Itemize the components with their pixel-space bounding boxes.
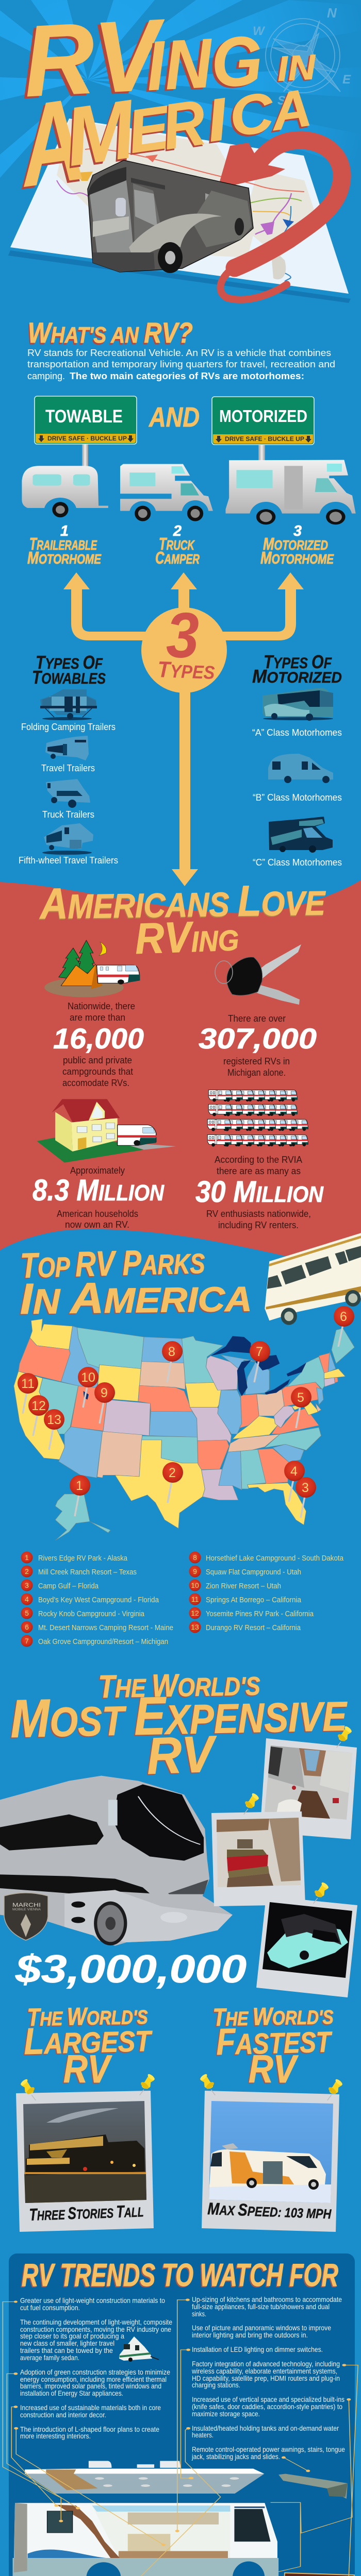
heading: The World's Fastest RV: FASTEST	[216, 2019, 333, 2063]
heading: The World's Fastest RV: THE WORLD'S	[212, 2002, 334, 2031]
label: Fifth-wheel Travel Trailers: Fifth-wheel Travel Trailers	[19, 855, 118, 866]
legend: RV parks 8-13: Durango RV Resort – California	[206, 1623, 301, 1632]
title: RVing in America: RV	[21, 0, 170, 118]
heading: Top RV Parks in America	[19, 1242, 252, 1324]
title: RVing in America: RV	[18, 0, 167, 120]
title: RVing in America: I	[202, 85, 233, 155]
text: trends left column: trailers that can be towed by the	[20, 2346, 113, 2354]
title: RVing in America: C	[225, 80, 278, 148]
road map paper	[8, 118, 351, 303]
heading: The World's Fastest RV: THE WORLD'S	[211, 2003, 333, 2032]
red route arrow swoosh	[220, 140, 342, 300]
text: trends right column: wireless capability, elaborate entertainment systems,	[191, 2367, 337, 2375]
vehicle: travel trailer	[45, 736, 89, 760]
numbered label: 3 Motorized Motorhome	[260, 523, 334, 567]
compass rose: W	[253, 24, 266, 38]
text: trends right column: sinks.	[192, 2310, 206, 2318]
sunburst rays	[0, 0, 361, 178]
text: 16,000 campgrounds: 16,000	[53, 1022, 144, 1055]
pin 13: 13	[47, 1413, 61, 1427]
text: 8.3 million households: 8.3 MILLION	[32, 1174, 165, 1207]
text: trends right column: interior lighting and bring the outdoors in.	[192, 2331, 308, 2339]
pin 10	[78, 1367, 99, 1408]
polaroid: glowing outline photo	[256, 1896, 357, 1997]
pin 12	[28, 1395, 49, 1436]
legend: RV parks 8-13: Squaw Flat Campground - Utah	[206, 1568, 301, 1577]
text: 307,000 registered RVs: registered RVs in	[223, 1056, 290, 1066]
pin 1	[70, 1475, 90, 1516]
pin 7: 7	[256, 1345, 263, 1359]
compass rose: S	[277, 94, 286, 108]
sign: Motorized	[212, 397, 314, 462]
push pins on large and fast polaroids	[20, 2073, 343, 2100]
text: 8.3 million households: Approximately	[70, 1165, 125, 1176]
legend: RV parks 8-13: 8	[193, 1553, 197, 1562]
arrows: three types branching	[63, 572, 304, 886]
pin 3	[296, 1477, 316, 1518]
heading: The World's Largest RV: RV	[63, 2047, 112, 2091]
sign: Towable: TOWABLE	[45, 406, 123, 427]
legend: RV parks 1-7: 5	[25, 1609, 29, 1617]
illustration: RV keys	[215, 944, 301, 1005]
heading: The World's Most Expensive RV: THE WORLD'S	[98, 1667, 260, 1705]
compass rose	[253, 5, 351, 108]
heading: The World's Largest RV: THE WORLD'S	[26, 2003, 147, 2032]
polaroid: three stories tall	[16, 2091, 154, 2232]
badge: 3 Types	[141, 600, 227, 693]
vehicle: truck trailer	[46, 779, 90, 808]
text: 8.3 million households: American households	[57, 1209, 138, 1219]
polaroid: three stories tall: THREE STORIES TALL	[29, 2201, 144, 2224]
text: trends left column: barriers, improved solar panels, tinted windows and	[20, 2382, 161, 2390]
text: trends right column: jack, stabilizing jacks and slides.	[191, 2452, 280, 2461]
legend: RV parks 1-7: Mt. Desert Narrows Camping Resort - Maine	[38, 1623, 173, 1632]
illustration: campground with tent and RV	[44, 940, 140, 997]
text: trends right column: Insulated/heated holding tanks and on-demand water	[192, 2424, 339, 2432]
text: trends left column: more interesting interiors.	[20, 2432, 91, 2440]
heading: The World's Most Expensive RV: RV	[145, 1726, 218, 1786]
pin 12: 12	[31, 1399, 46, 1413]
heading: The World's Largest RV: LARGEST	[22, 2019, 153, 2063]
illustration: cream vintage RV	[265, 1233, 361, 1325]
text: trends left column: average family sedan.	[20, 2353, 79, 2362]
panel: RV trends	[9, 2253, 355, 2576]
legend: RV parks 1-7	[21, 1552, 173, 1647]
heading: Types of Towables: TYPES OF	[36, 652, 103, 673]
title: RVing in America: E	[122, 95, 173, 168]
label: A class: “A” Class Motorhomes	[252, 727, 342, 738]
photo: kitchen interior	[281, 2573, 354, 2576]
text: 16,000 campgrounds: accomodate RVs.	[62, 1078, 129, 1088]
text: 16,000 campgrounds	[53, 1001, 144, 1088]
text: trends left column: new class of smaller, lighter travel	[20, 2339, 114, 2347]
price: $3,000,000: $3,000,000	[15, 1947, 247, 1991]
title: RVing in America: A	[266, 78, 315, 142]
legend: RV parks 1-7: 3	[25, 1581, 29, 1589]
legend: RV parks 1-7: 7	[25, 1637, 29, 1645]
numbered label: 1 Trailerable Motorhome: 1	[60, 523, 69, 539]
heading: The World's Most Expensive RV: THE WORLD'S	[97, 1668, 259, 1706]
text: 8.3 million households: now own an RV.	[65, 1219, 129, 1230]
text: trends right column: Installation of LED lighting on dimmer switches.	[192, 2345, 323, 2353]
legend: RV parks 1-7: Mill Creek Ranch Resort – Texas	[38, 1568, 137, 1577]
title: RVing in America: IN	[275, 48, 316, 90]
heading: What's an RV?: WHAT'S AN RV?	[28, 316, 193, 349]
text: trends left column: construction and interior decor.	[20, 2411, 106, 2419]
text: trends left column: construction components, moving the RV industry one	[20, 2325, 171, 2333]
text: trends left column: Increased use of sustainable materials both in core	[20, 2403, 161, 2412]
title: RVing in America: E	[124, 93, 175, 166]
text: trends left column: step closer to its goal of producing a	[20, 2332, 124, 2340]
vehicle: A class motorhome	[262, 688, 333, 721]
text: trends right column: Use of picture and panoramic windows to improve	[192, 2324, 331, 2332]
polaroid: bedroom photo	[211, 1811, 305, 1906]
label: C class: “C” Class Motorhomes	[253, 857, 342, 868]
numbered label: 3 Motorized Motorhome: MOTORHOME	[260, 548, 334, 567]
legend: RV parks 1-7: 2	[25, 1567, 29, 1575]
heading: The World's Fastest RV: FASTEST	[215, 2020, 332, 2064]
legend: RV parks 1-7: Oak Grove Campground/Resort – Michigan	[38, 1637, 168, 1646]
pin 13	[44, 1409, 64, 1450]
text: trends right column: heaters.	[192, 2431, 214, 2439]
pin 7	[250, 1341, 270, 1382]
icon: trailer RV	[22, 466, 108, 522]
text: 30 million enthusiasts	[195, 1155, 324, 1230]
legend: RV parks 1-7: Camp Gulf – Florida	[38, 1582, 99, 1590]
map: United States	[14, 1319, 354, 1540]
badge: Marchi Mobile shield: MARCHI	[12, 1902, 41, 1908]
badge: 3 Types: TYPES	[157, 657, 215, 684]
title: RVing in America: ING	[142, 23, 261, 107]
illustration: grey motorhome	[88, 160, 253, 273]
legend: RV parks 1-7: 6	[25, 1623, 29, 1631]
heading: The World's Fastest RV	[211, 2002, 334, 2092]
numbered label: 3 Motorized Motorhome: MOTORIZED	[263, 534, 328, 553]
numbered label: 2 Truck Camper: 2	[173, 523, 182, 539]
numbered label: 2 Truck Camper: CAMPER	[155, 548, 200, 567]
text: 30 million enthusiasts: including RV renters.	[218, 1220, 299, 1230]
pin 5	[291, 1387, 311, 1428]
text: trends left column: Adoption of green construction strategies to minimize	[20, 2368, 170, 2376]
heading: Americans Love RVing	[38, 875, 326, 963]
heading: Types of Motorized	[252, 651, 342, 687]
icon: motorized RV	[225, 460, 356, 532]
polaroid: max speed 103 mph	[202, 2091, 339, 2232]
heading: Types of Motorized: MOTORIZED	[252, 666, 342, 687]
legend: RV parks 8-13: 12	[191, 1609, 199, 1617]
text: trends right column: maximize storage space.	[192, 2410, 260, 2418]
title: RVing in America: M	[58, 84, 140, 185]
text: 30 million enthusiasts: 30 MILLION	[195, 1175, 324, 1209]
label: Truck Trailers: Truck Trailers	[42, 809, 94, 820]
legend: RV parks 8-13: 13	[191, 1623, 199, 1631]
legend: RV parks 8-13: 11	[191, 1595, 199, 1603]
pin 8	[162, 1341, 183, 1382]
polaroid: max speed 103 mph: MAX SPEED: 103 MPH	[207, 2199, 332, 2222]
badge: 3 Types: 3	[166, 600, 199, 671]
label: B class: “B” Class Motorhomes	[253, 792, 342, 803]
text: 16,000 campgrounds: campgrounds that	[62, 1066, 133, 1077]
heading: The World's Fastest RV: RV	[248, 2048, 298, 2092]
heading: The World's Largest RV: LARGEST	[23, 2018, 154, 2062]
word: AND: AND	[148, 402, 200, 433]
text: trends right column: full-size appliances, full-size tub/showers and dual	[192, 2302, 330, 2311]
sign: Towable: DRIVE SAFE · BUCKLE UP	[47, 435, 127, 442]
icon: A-frame trailer	[119, 2336, 159, 2362]
text: 30 million enthusiasts: RV enthusiasts nationwide,	[206, 1209, 311, 1219]
text: trends left column: The continuing development of light-weight, composite	[20, 2318, 172, 2326]
pin 6	[334, 1306, 354, 1347]
cutaway RV: body	[13, 2503, 278, 2576]
text: trends right column: Up-sizing of kitchens and bathrooms to accommodate	[192, 2295, 342, 2303]
heading: Top RV Parks in America: IN AMERICA	[19, 1273, 251, 1324]
text: RV definition: The two main categories of RVs are motorhomes:	[70, 371, 304, 381]
text: 307,000 registered RVs: There are over	[228, 1013, 286, 1024]
text: 30 million enthusiasts: According to the RVIA	[215, 1155, 302, 1165]
pin 11: 11	[21, 1377, 35, 1391]
text: RV definition: transportation and temporary living quarters for travel, recreation and	[27, 359, 335, 369]
text: trends left column	[20, 2296, 172, 2440]
label: Folding Camping Trailers: Folding Camping Trailers	[21, 722, 116, 732]
cutaway RV: roof	[25, 2461, 264, 2494]
heading: Top RV Parks in America: TOP RV PARKS	[19, 1243, 204, 1286]
heading: The World's Most Expensive RV: MOST EXPENSIVE	[9, 1683, 348, 1750]
text: 307,000 registered RVs: 307,000	[199, 1022, 317, 1055]
badge: Marchi Mobile shield: MOBILE VIENNA	[12, 1908, 41, 1911]
numbered label: 1 Trailerable Motorhome: TRAILERABLE	[29, 534, 97, 553]
sign: Towable	[35, 396, 137, 467]
pin 11	[18, 1373, 38, 1414]
text: trends left column: installation of Energy Star appliances.	[20, 2389, 123, 2397]
text: trends right column	[191, 2295, 345, 2461]
pin 5: 5	[297, 1391, 304, 1405]
pin 6: 6	[340, 1310, 347, 1324]
legend: RV parks 1-7: Boyd’s Key West Campground - Florida	[38, 1596, 159, 1604]
title: RVing in America: A	[9, 74, 91, 211]
pin 10: 10	[81, 1370, 95, 1385]
text: 16,000 campgrounds: public and private	[63, 1055, 132, 1065]
title: RVing in America: A	[7, 76, 89, 214]
heading: Americans Love RVing: AMERICANS LOVE	[38, 876, 326, 929]
title: RVing in America: R	[157, 89, 208, 165]
text: trends right column: Factory integration of advanced technology, including	[192, 2360, 340, 2368]
legend: RV parks 1-7: 1	[25, 1553, 29, 1562]
text: 16,000 campgrounds: are more than	[70, 1012, 125, 1023]
heading: Americans Love RVing: RVING	[134, 911, 240, 963]
legend: RV parks 1-7: 4	[25, 1595, 29, 1603]
heading: Types of Motorized: TYPES OF	[264, 651, 332, 672]
text: RV definition: RV stands for Recreational Vehicle. An RV is a vehicle that combines	[27, 348, 331, 358]
text: trends left column: The introduction of L-shaped floor plans to create	[20, 2425, 159, 2433]
heading: The World's Largest RV: RV	[62, 2048, 111, 2092]
legend: RV parks 8-13: Yosemite Pines RV Park - California	[206, 1609, 314, 1618]
numbered label: 2 Truck Camper: TRUCK	[159, 534, 195, 553]
heading: The World's Largest RV: THE WORLD'S	[27, 2002, 148, 2031]
cutaway RV: awning	[278, 2474, 348, 2499]
text: trends left column: energy consumption, including more efficient thermal	[20, 2375, 167, 2383]
text: trends left column: cut fuel consumption.	[20, 2303, 80, 2312]
title: RVing in America: C	[224, 82, 276, 150]
badge: Marchi Mobile shield	[4, 1893, 48, 1940]
numbered label: 1 Trailerable Motorhome	[27, 523, 102, 567]
text: 8.3 million households	[32, 1165, 165, 1230]
polaroid: interior photo	[260, 1738, 357, 1839]
heading: The World's Most Expensive RV	[9, 1667, 349, 1786]
text: 16,000 campgrounds: Nationwide, there	[68, 1001, 135, 1011]
legend: RV parks 8-13: 10	[191, 1581, 199, 1589]
vehicle: fifth-wheel trailer	[42, 823, 93, 855]
pin 3: 3	[302, 1481, 309, 1495]
text: trends right column: HD capability, satellite prep, HDMI routers and plug-in	[192, 2374, 340, 2382]
pin 2: 2	[169, 1466, 176, 1480]
text: 307,000 registered RVs	[199, 1013, 317, 1078]
text: trends left column: Greater use of light-weight construction materials to	[20, 2296, 165, 2304]
heading: Top RV Parks in America: TOP RV PARKS	[20, 1242, 205, 1285]
title: RVing in America	[7, 0, 318, 214]
illustration: rows of RVs	[207, 1090, 308, 1146]
heading: Types of Towables: TOWABLES	[32, 667, 106, 688]
legend: RV parks 8-13: Springs At Borrego – California	[206, 1596, 302, 1604]
vehicle: folding camping trailer	[40, 689, 97, 720]
numbered label: 2 Truck Camper	[155, 523, 200, 567]
title: RVing in America: A	[265, 80, 313, 144]
title: RVing in America: I	[201, 87, 231, 156]
heading: Americans Love RVing: AMERICANS LOVE	[39, 875, 326, 928]
title: RVing in America: ING	[145, 21, 264, 105]
pin 9: 9	[101, 1386, 108, 1400]
heading: Top RV Parks in America: IN AMERICA	[20, 1272, 252, 1323]
push pins on polaroids	[244, 1725, 353, 1904]
vehicle: B class motorhome	[268, 754, 333, 783]
title: RVing in America: M	[60, 82, 142, 183]
heading: What's an RV?: WHAT'S AN RV?	[27, 318, 192, 350]
sign: Motorized: DRIVE SAFE · BUCKLE UP	[225, 435, 304, 443]
icon: truck camper	[120, 464, 213, 526]
text: trends right column: (knife safes, door caddies, accordion-style pantries) to	[192, 2402, 342, 2411]
pin 1: 1	[76, 1479, 83, 1493]
legend: RV parks 8-13: Zion River Resort – Utah	[206, 1582, 281, 1590]
compass rose: E	[342, 73, 351, 87]
text: 30 million enthusiasts: there are as many as	[217, 1166, 301, 1176]
legend: RV parks 8-13: Horsethief Lake Campground - South Dakota	[206, 1554, 344, 1563]
heading: The World's Fastest RV: RV	[249, 2047, 299, 2091]
legend: RV parks 8-13	[189, 1552, 344, 1633]
numbered label: 3 Motorized Motorhome: 3	[293, 523, 302, 539]
legend: RV parks 1-7: Rocky Knob Campground - Virginia	[38, 1609, 145, 1618]
illustration: house with RV	[37, 1099, 176, 1163]
pin 4: 4	[290, 1464, 298, 1479]
section: red Americans Love RVing background	[0, 880, 361, 1278]
compass rose: N	[327, 5, 337, 21]
text: RV definition	[27, 348, 335, 381]
heading: The World's Most Expensive RV: RV	[146, 1725, 219, 1785]
photo: luxury RV Marchi Mobile	[0, 1776, 233, 1946]
text: trends right column: charging stations.	[192, 2381, 240, 2389]
title: RVing in America: IN	[276, 47, 318, 89]
heading: The World's Largest RV	[22, 2002, 154, 2092]
heading: Types of Towables	[32, 652, 106, 688]
sign: Motorized: MOTORIZED	[219, 406, 307, 426]
vehicle: C class motorhome	[269, 817, 333, 853]
legend: RV parks 8-13: 9	[193, 1567, 197, 1575]
text: RV definition: camping.	[27, 371, 65, 381]
label: Travel Trailers: Travel Trailers	[41, 763, 95, 773]
legend: RV parks 1-7: Rivers Edge RV Park - Alaska	[38, 1554, 128, 1563]
text: 307,000 registered RVs: Michigan alone.	[227, 1067, 286, 1078]
pin 9	[94, 1382, 115, 1423]
callout lines: trend connectors	[3, 2299, 358, 2576]
pin 8: 8	[168, 1345, 175, 1359]
title: RVing in America: R	[158, 87, 210, 163]
pin 2	[162, 1462, 183, 1503]
pin 4	[284, 1461, 305, 1502]
numbered label: 1 Trailerable Motorhome: MOTORHOME	[27, 548, 102, 567]
